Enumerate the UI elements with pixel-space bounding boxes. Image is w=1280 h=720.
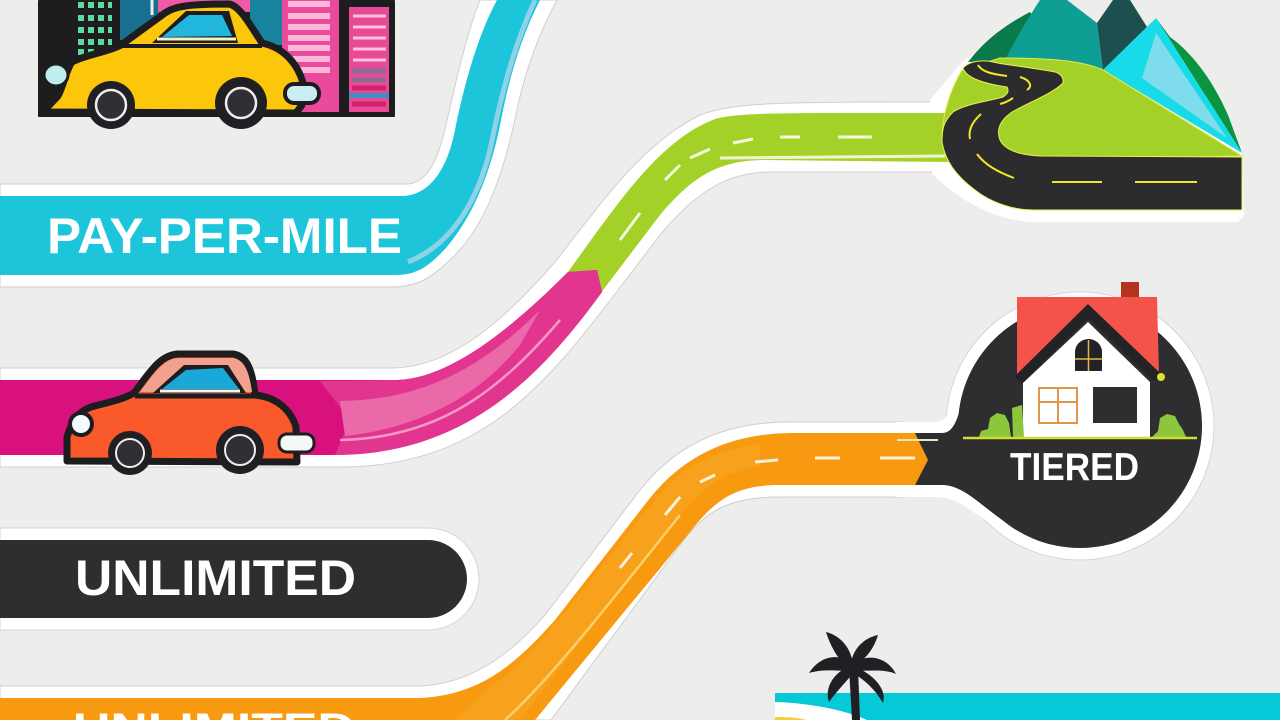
door [1093, 387, 1137, 423]
icon: winding black road [942, 61, 1242, 210]
icon: car window [162, 15, 232, 37]
panel: tiered badge [895, 282, 1214, 560]
icon: front wheel [87, 81, 135, 129]
panel: unlimited pill [0, 528, 479, 630]
label: unlimited: UNLIMITED [75, 550, 356, 606]
house wall [1023, 322, 1150, 438]
badge circle [958, 304, 1202, 548]
red roof [1017, 297, 1159, 377]
roof edge [1018, 311, 1158, 380]
icon: teal peak [1005, 0, 1103, 70]
label: tiered: TIERED [1010, 446, 1139, 489]
halo neck [895, 380, 1000, 530]
icon: cyan peak [1103, 18, 1242, 153]
icon: rear wheel [215, 77, 267, 129]
icon: green hill [942, 58, 1242, 160]
panel: orange road halo [0, 422, 905, 720]
icon: dark green hill [968, 12, 1060, 62]
label: pay-per-mile: PAY-PER-MILE [47, 208, 402, 264]
panel: mountain scene [942, 0, 1242, 210]
icon: road dashes [969, 65, 1197, 182]
panel: pink road [0, 270, 602, 455]
icon: yellow car body [43, 4, 303, 113]
icon: palm tree [809, 632, 896, 720]
icon: house [1017, 282, 1165, 438]
icon: left bush [979, 405, 1024, 437]
panel: orange road [0, 433, 938, 720]
lower window [1039, 388, 1077, 423]
chimney [1121, 282, 1139, 298]
icon: right green slope [1156, 18, 1242, 153]
lamp [1157, 373, 1165, 381]
icon: right bush [1152, 414, 1186, 437]
panel: beach [775, 632, 1280, 720]
icon: tail light [285, 84, 319, 103]
panel: pay-per-mile road [0, 0, 557, 287]
icon: front wheel [108, 431, 152, 475]
halo circle [946, 292, 1214, 560]
badge neck [900, 403, 1010, 525]
attic window [1075, 339, 1102, 371]
panel: mountain halo [930, 30, 1244, 222]
icon: tail light [279, 434, 314, 452]
panel: yellow car in city [38, 0, 395, 129]
icon: dark peak [1097, 0, 1147, 70]
icon: city block [38, 0, 395, 117]
panel: green road [568, 113, 950, 294]
icon: red car body [67, 354, 297, 462]
icon: car roof trim [140, 358, 252, 392]
icon: car window frame [152, 11, 238, 43]
icon: headlight [44, 64, 68, 86]
ground line [963, 437, 1197, 439]
panel: pink and green road halo [0, 102, 945, 467]
icon: car window [162, 368, 239, 389]
icon: headlight [68, 411, 94, 437]
icon: car window frame [153, 365, 246, 393]
icon: rear wheel [216, 426, 264, 474]
panel: red car [67, 354, 314, 475]
